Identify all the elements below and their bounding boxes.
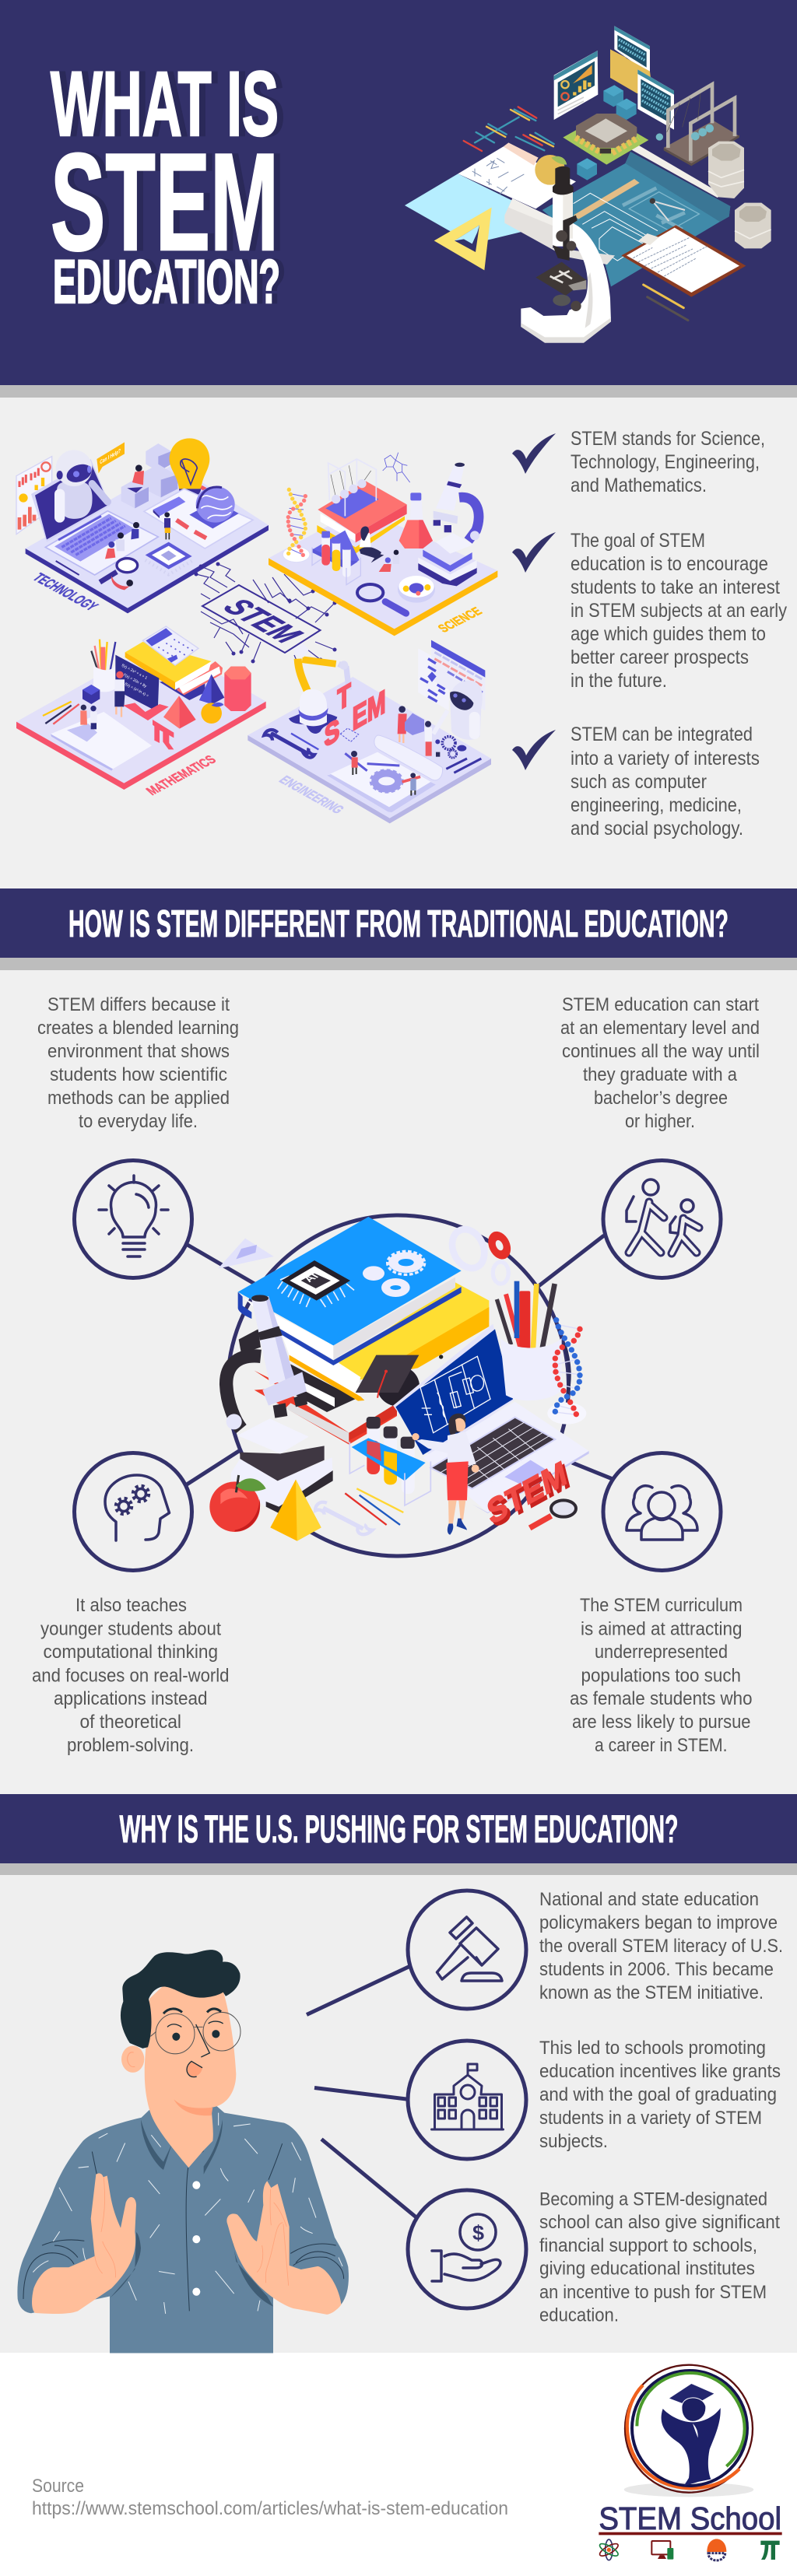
icon: head with gears — [75, 1453, 191, 1570]
floating gears — [446, 1224, 515, 1284]
wrench and pencils — [315, 1488, 403, 1534]
microscope — [226, 1295, 333, 1513]
text: elementary to degree: or higher. — [625, 1111, 695, 1132]
text: what STEM stands for: Technology, Engineering, — [571, 451, 760, 473]
laptop — [393, 1324, 589, 1513]
title: WHAT IS — [57, 53, 285, 156]
AI chip on cover: AI — [301, 1272, 322, 1284]
red STEM lettering: STEM — [483, 1453, 570, 1532]
text: blended learning: methods can be applied — [47, 1088, 230, 1109]
heading band: how is STEM different — [0, 888, 797, 958]
text: it also teaches: It also teaches — [75, 1595, 187, 1616]
cube and loose pencils — [43, 685, 100, 724]
text: financial support: financial support to schools, — [539, 2235, 757, 2256]
title: EDUCATION? — [58, 247, 286, 316]
text: STEM initiative: students in 2006. This became — [539, 1959, 774, 1980]
text: financial support: Becoming a STEM-designated — [539, 2189, 767, 2210]
ear — [121, 2045, 144, 2073]
text: education incentives — [539, 2038, 781, 2152]
blackboard — [115, 655, 159, 712]
icon: group of people — [603, 1453, 721, 1570]
heading band: why is the US pushing — [0, 1794, 797, 1863]
text: integration: engineering, medicine, — [571, 794, 742, 816]
text: elementary to degree: at an elementary level and — [560, 1018, 760, 1039]
text: it also teaches: of theoretical — [79, 1712, 181, 1733]
text: elementary to degree — [560, 994, 760, 1132]
blue book — [238, 1217, 462, 1365]
text: education incentives: subjects. — [539, 2131, 608, 2152]
blackboard: f'(x) = 20x + 8y — [122, 673, 148, 689]
illustration: technology platform — [16, 438, 269, 614]
chart panels — [16, 457, 52, 534]
text: education incentives: and with the goal of graduating — [539, 2084, 777, 2105]
text: blended learning: to everyday life. — [79, 1111, 198, 1132]
icon: coloured abacus sticks — [464, 107, 554, 151]
hand lines — [95, 2177, 289, 2286]
platform — [26, 464, 269, 613]
DNA helix — [547, 1317, 586, 1425]
text: education incentives: education incentives like grants — [539, 2061, 781, 2082]
text: financial support: education. — [539, 2304, 619, 2326]
logo: STEM School — [598, 2365, 782, 2560]
blackboard: f(x) = 2x² + x + 1 — [121, 663, 148, 681]
text: education incentives: This led to schools promoting — [539, 2038, 766, 2059]
robot arm — [289, 643, 349, 734]
text: goal of STEM: The goal of STEM — [571, 530, 705, 552]
circuit board and brain — [144, 486, 253, 548]
text: curriculum: is aimed at attracting — [581, 1618, 743, 1640]
title: STEM — [51, 124, 279, 279]
text: it also teaches: applications instead — [54, 1688, 207, 1709]
teacher — [114, 671, 125, 717]
hero illustration: isometric STEM desk — [405, 26, 771, 343]
text: it also teaches: younger students about — [40, 1618, 221, 1640]
text: integration — [571, 724, 760, 839]
text: STEM initiative — [539, 1889, 783, 2003]
AI chip — [146, 542, 193, 574]
text: goal of STEM: education is to encourage — [571, 553, 768, 575]
text: goal of STEM: age which guides them to — [571, 623, 766, 645]
red book — [255, 1371, 397, 1445]
text: curriculum: underrepresented — [595, 1642, 728, 1663]
checkmark 2 — [512, 532, 556, 573]
chin shadow — [174, 2099, 212, 2115]
text: blended learning: students how scientific — [50, 1064, 227, 1085]
checkmark 1 — [512, 433, 556, 474]
icon: hand holding coin — [408, 2190, 526, 2308]
red STEM lettering: STEM — [486, 1456, 573, 1535]
text: what STEM stands for — [571, 428, 765, 496]
speech bubble — [97, 442, 125, 473]
text: integration: and social psychology. — [571, 818, 743, 839]
icon: hand holding coin: $ — [472, 2221, 484, 2245]
source — [32, 2476, 508, 2519]
flask — [399, 492, 433, 548]
source: Source — [32, 2476, 84, 2497]
yellow book — [280, 1282, 489, 1401]
red STEM letters: EM — [353, 682, 386, 738]
icon: light bulb — [75, 1161, 191, 1277]
text: elementary to degree: they graduate with a — [583, 1064, 738, 1085]
illustration: STEM chip: STEM — [216, 594, 311, 648]
icon: walking student and child — [603, 1161, 721, 1277]
magnifier and petri dish — [357, 576, 435, 613]
paper plane — [218, 1239, 274, 1269]
blackboard: f(x) = (x²-ln x) = — [124, 682, 149, 699]
dashed square — [340, 728, 359, 741]
text: blended learning: environment that shows — [47, 1041, 230, 1062]
text: it also teaches: and focuses on real-world — [32, 1665, 229, 1687]
label: engineering: ENGINEERING — [276, 773, 348, 816]
icon: dashboard window — [554, 51, 598, 120]
geometric solids — [123, 667, 251, 729]
apple and cone — [209, 1475, 321, 1541]
title: STEM — [57, 124, 285, 279]
AI chip on cover — [278, 1260, 354, 1307]
logo rings — [625, 2365, 753, 2493]
illustration: man with glasses — [17, 1950, 349, 2353]
DNA helix — [283, 488, 310, 563]
text: integration: STEM can be integrated — [571, 724, 753, 745]
text: STEM initiative: National and state education — [539, 1889, 759, 1910]
icon: triangle ruler — [434, 208, 492, 270]
text: curriculum: The STEM curriculum — [580, 1595, 743, 1616]
boxes and lightbulb — [121, 438, 209, 508]
text: goal of STEM: in the future. — [571, 670, 667, 692]
text: curriculum: a career in STEM. — [595, 1735, 727, 1756]
text: blended learning: STEM differs because it — [47, 994, 230, 1015]
calculator — [142, 626, 198, 665]
logo underline — [599, 2532, 782, 2535]
text: STEM initiative: known as the STEM initiative. — [539, 1982, 764, 2003]
text: blended learning: creates a blended learning — [37, 1018, 239, 1039]
label: technology: TECHNOLOGY — [29, 571, 101, 614]
text: elementary to degree: continues all the way until — [562, 1041, 760, 1062]
illustration: STEM chip — [195, 562, 336, 668]
icon: pencils — [644, 285, 688, 321]
text: curriculum: are less likely to pursue — [572, 1712, 750, 1733]
black book and pages — [290, 1364, 358, 1412]
text: it also teaches — [32, 1595, 229, 1756]
text: it also teaches: computational thinking — [44, 1642, 218, 1663]
charts and robot — [418, 640, 485, 740]
text: financial support: an incentive to push for STEM — [539, 2282, 767, 2303]
icon: pi — [760, 2541, 780, 2560]
text: curriculum — [570, 1595, 752, 1756]
open book with kids — [51, 705, 152, 771]
platform — [16, 640, 266, 790]
hair — [121, 1950, 241, 2049]
icon: cpu chip — [563, 114, 648, 165]
text: integration: into a variety of interests — [571, 748, 760, 769]
central illustration: books, laptop and science tools — [209, 1217, 589, 1541]
icon: data cubes — [577, 85, 637, 180]
label: mathematics: MATHEMATICS — [142, 753, 219, 797]
icon: atom — [598, 2539, 620, 2560]
logo figure — [662, 2384, 721, 2487]
icon: school building — [408, 2041, 526, 2159]
test tube rack — [349, 1417, 430, 1505]
title: EDUCATION? — [53, 247, 280, 316]
text: blended learning — [37, 994, 239, 1132]
cup and pencils — [91, 640, 115, 692]
connector lines and central ring — [187, 1215, 613, 1556]
right hand — [226, 2181, 341, 2315]
speech bubble: Can I Help? — [100, 447, 121, 466]
platform — [269, 508, 497, 636]
neck and face — [145, 1985, 236, 2168]
title: WHAT IS — [51, 53, 279, 156]
icon: yellow apple — [535, 155, 567, 185]
text: elementary to degree: STEM education can start — [562, 994, 759, 1015]
text: financial support — [539, 2189, 780, 2326]
icon: Newton's cradle — [656, 84, 739, 166]
shirt — [17, 2106, 349, 2353]
text: education incentives: students in a variety of STEM — [539, 2108, 762, 2129]
engineers — [351, 706, 441, 796]
text: goal of STEM: better career prospects — [571, 647, 749, 668]
laptop with robot — [31, 450, 158, 575]
magnifier — [530, 1500, 576, 1528]
icon: pi symbol — [153, 720, 174, 749]
logo wordmark: STEM School — [599, 2501, 781, 2536]
icon: paper sheet with sums — [405, 142, 576, 244]
text: curriculum: as female students who — [570, 1688, 752, 1709]
molecule — [383, 453, 410, 482]
title — [51, 53, 286, 316]
text: what STEM stands for: STEM stands for Science, — [571, 428, 765, 450]
gears on cover — [363, 1251, 425, 1297]
connector lines — [307, 1967, 417, 2218]
small people and magnifier — [56, 464, 170, 590]
tools — [264, 730, 481, 773]
text: curriculum: populations too such — [581, 1665, 741, 1687]
icon: computer — [651, 2541, 673, 2560]
icon: helmet and gear — [707, 2539, 726, 2560]
text: what STEM stands for: and Mathematics. — [571, 475, 707, 496]
left hand — [32, 2173, 136, 2314]
platform — [248, 677, 491, 823]
red STEM letters — [325, 677, 386, 755]
illustration: mathematics platform — [16, 626, 266, 797]
text: financial support: school can also give significant — [539, 2212, 780, 2233]
icon: clipboard — [621, 225, 746, 297]
text: it also teaches: problem-solving. — [67, 1735, 194, 1756]
illustration: engineering platform — [248, 640, 491, 823]
text: STEM initiative: policymakers began to improve — [539, 1912, 778, 1933]
text: financial support: giving educational institutes — [539, 2258, 755, 2280]
mortarboard cap — [356, 1355, 420, 1407]
label: science: SCIENCE — [434, 605, 485, 635]
icon: gavel — [408, 1891, 526, 2009]
text: elementary to degree: bachelor’s degree — [594, 1088, 728, 1109]
shirt details — [23, 2113, 344, 2314]
cup with pencils — [497, 1281, 562, 1400]
red STEM letters: S — [325, 712, 339, 755]
icon: blueprint sheet — [542, 138, 730, 286]
microscope — [418, 463, 479, 586]
checkmark 3 — [512, 730, 556, 770]
text: integration: such as computer — [571, 771, 707, 793]
icon: octagonal tubes — [708, 142, 771, 248]
icon: binary window and folder — [610, 26, 674, 130]
illustration: science platform — [269, 453, 497, 636]
source: https://www.stemschool.com/articles/what-is-stem-education — [32, 2498, 508, 2519]
books and cradle — [317, 459, 407, 554]
teacher — [412, 1414, 479, 1535]
icon: white microscope — [504, 166, 615, 343]
glasses and face details — [128, 2009, 241, 2077]
text: goal of STEM — [571, 530, 787, 692]
stack of books — [125, 642, 223, 700]
plan sheet with gear — [327, 735, 443, 812]
red STEM letters: T — [337, 677, 351, 718]
teacher and kids — [360, 526, 399, 572]
logo shadow — [624, 2483, 753, 2497]
test tube rack — [312, 531, 360, 585]
